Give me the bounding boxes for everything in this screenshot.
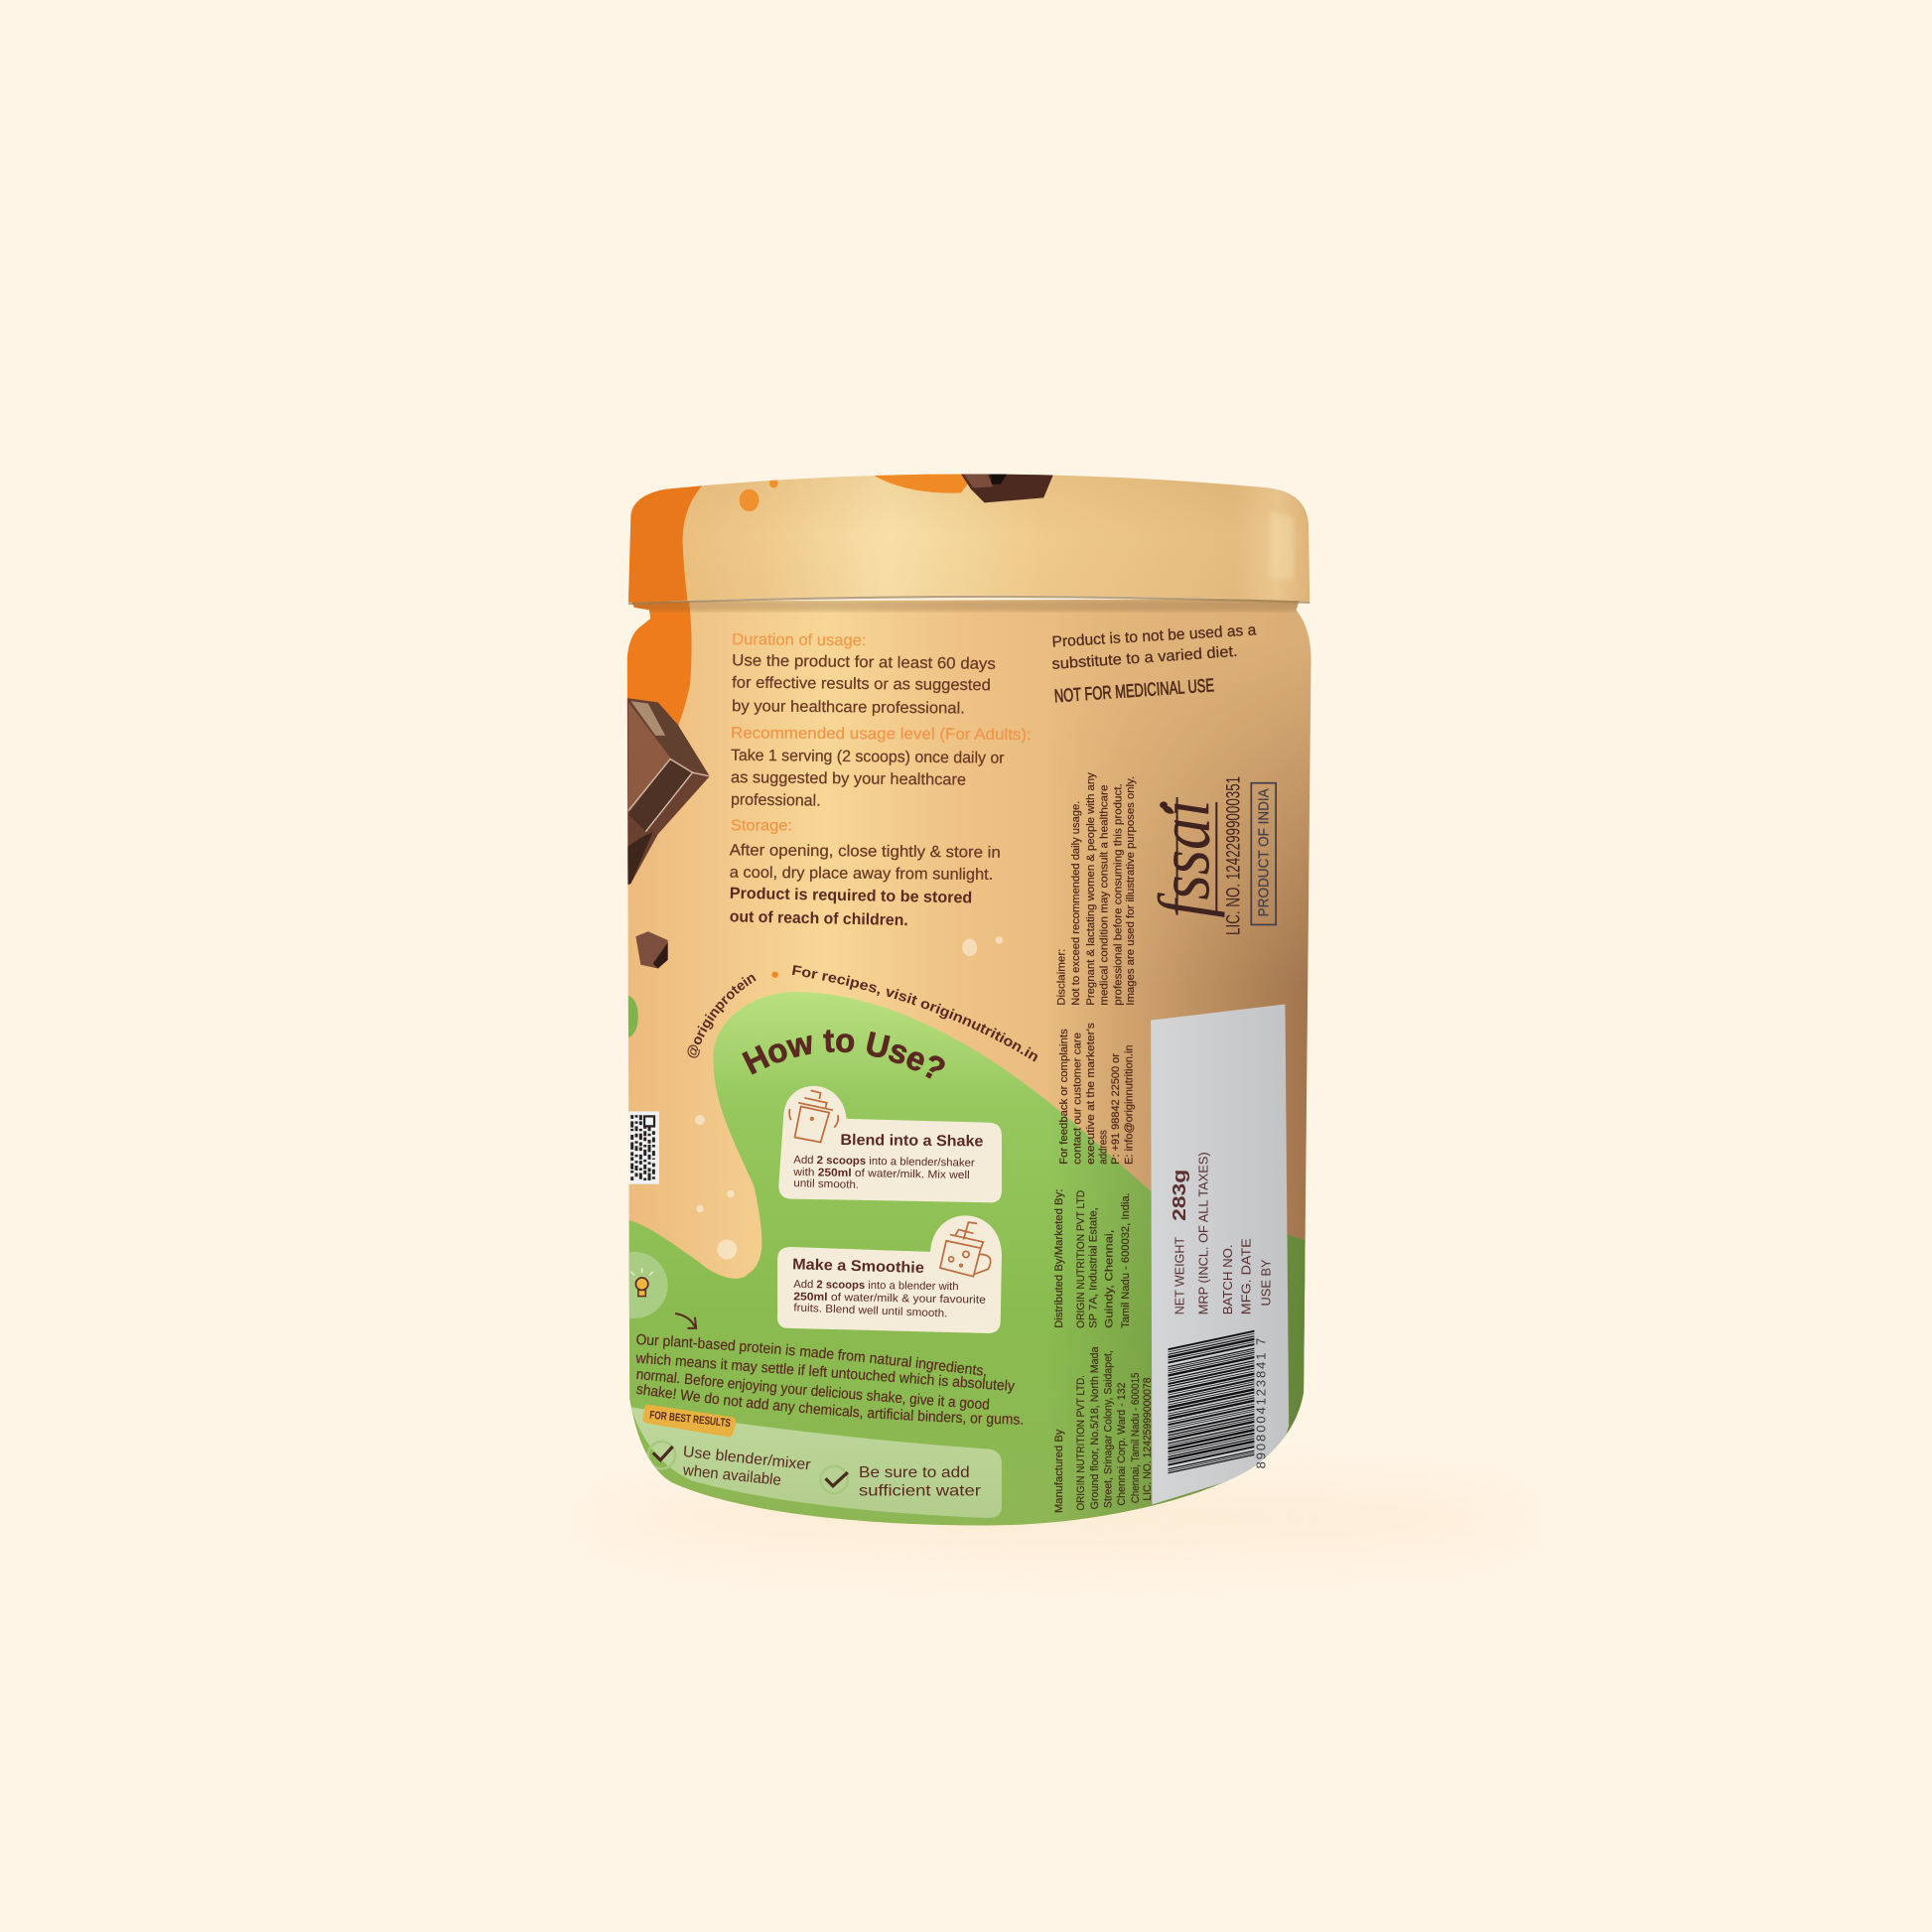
how-to-use card: shake [778,1086,1002,1202]
disclaimer block: professional before consuming this product. [1112,783,1124,1006]
product settling note: which means it may settle if left untouched which is absolutely [635,1352,1015,1394]
product settling note: normal. Before enjoying your delicious shake, give it a good [636,1370,989,1411]
orange splash top [863,469,980,493]
check item two: Be sure to add [859,1464,970,1481]
orange splash on lid [622,469,705,610]
fssai logo [1144,776,1245,935]
feedback block: E: info@originnutrition.in [1124,1044,1136,1165]
distributed by block: ORIGIN NUTRITION PVT LTD [1075,1190,1087,1328]
green side shading [1083,1133,1306,1517]
text: blend [792,1132,984,1191]
text: blend: Add 2 scoops into a blender/shaker [793,1155,975,1170]
usage directions text: Recommended usage level (For Adults): [731,724,1032,744]
jar body [602,598,1318,1553]
text: blend: Blend into a Shake [840,1132,984,1150]
best results panel [630,1407,1002,1518]
barcode [1211,1338,1269,1468]
usage directions text: a cool, dry place away from sunlight. [730,864,993,884]
bulb badge [629,1251,668,1318]
disclaimer block [1055,772,1137,1006]
product settling note [635,1334,1023,1427]
green leaf [627,996,638,1037]
text: blend: until smooth. [793,1177,859,1191]
usage directions text: by your healthcare professional. [732,697,965,718]
usage directions text: Storage: [731,816,792,834]
manufactured by block: Chennai Corp. Ward - 132 [1116,1382,1128,1506]
disclaimer block: Disclaimer: [1055,949,1067,1006]
distributed by block: Distributed By/Marketed By: [1053,1189,1065,1328]
text: smoothie: Make a Smoothie [792,1256,925,1277]
social and recipes curved text [687,965,1037,1062]
arrow [675,1313,696,1328]
disclaimer block: medical condition may consult a healthcare [1099,785,1111,1006]
label text: USE BY [1259,1259,1274,1307]
QR code [628,1111,659,1184]
product settling note: Our plant-based protein is made from natural ingredients, [636,1334,986,1378]
distributed by block: Guindy, Chennai, [1104,1230,1116,1328]
feedback block: For feedback or complaints [1058,1029,1070,1165]
green wave and how-to-use panel [617,992,1318,1553]
distributed by block: Tamil Nadu - 600032, India. [1120,1192,1132,1328]
check item one: Use blender/mixer [682,1444,811,1473]
diet notice: NOT FOR MEDICINAL USE [1053,674,1215,706]
fssai logo: LIC. NO. 12422999000351 [1224,776,1245,935]
distributed by block [1053,1189,1132,1328]
label text: MRP (INCL. OF ALL TAXES) [1195,1152,1210,1314]
usage directions text: as suggested by your healthcare [731,768,966,789]
social and recipes curved text: @originprotein [687,975,757,1058]
label text: MFG. DATE [1239,1238,1254,1314]
diet notice: Product is to not be used as a [1051,621,1257,651]
usage directions text: Duration of usage: [732,630,867,649]
text: smoothie: 250ml of water/milk & your favourite [793,1291,986,1307]
label text: 283g [1169,1170,1189,1221]
check item two [821,1464,981,1500]
check item one: when available [681,1462,782,1489]
usage directions text: out of reach of children. [730,907,908,929]
decorative dots [695,936,1003,1259]
product jar illustration [627,475,1486,1559]
disclaimer block: Pregnant & lactating women & people with any [1085,772,1097,1006]
disclaimer block: Not to exceed recommended daily usage. [1070,801,1082,1006]
how to use heading: How to Use? [742,1030,945,1079]
manufactured by block: ORIGIN NUTRITION PVT LTD. [1075,1375,1087,1511]
orange dots [740,479,778,511]
product settling note: shake! We do not add any chemicals, artificial binders, or gums. [635,1384,1023,1427]
manufactured by block [1053,1346,1154,1513]
icon: shaker [789,1090,838,1142]
usage directions text: for effective results or as suggested [732,674,991,694]
usage directions text: Product is required to be stored [730,885,972,906]
white price label [1151,1004,1289,1504]
usage directions text: Take 1 serving (2 scoops) once daily or [731,747,1005,767]
usage directions text: Use the product for at least 60 days [732,651,996,673]
diet notice [1051,621,1257,706]
disclaimer block: Images are used for illustrative purposes only. [1125,776,1137,1006]
text: smoothie: fruits. Blend well until smooth. [793,1303,948,1319]
diet notice: substitute to a varied diet. [1051,643,1238,673]
feedback block [1058,1023,1136,1165]
usage directions text: After opening, close tightly & store in [730,841,1001,862]
check item one [648,1442,811,1489]
feedback block: contact our customer care [1071,1033,1083,1165]
small chocolate piece [635,931,668,968]
fssai logo: fssai [1144,799,1225,918]
icon: smoothie jar [940,1222,991,1277]
manufactured by block: Ground floor, No.5/18, North Mada [1089,1346,1101,1509]
manufactured by block: Street, Srinagar Colony, Saidapet, [1102,1350,1114,1508]
chocolate piece top [957,469,1056,502]
how-to-use card: smoothie [777,1215,1002,1333]
usage directions text [730,630,1032,929]
product of india box: PRODUCT OF INDIA [1257,788,1273,916]
orange splash on body [627,601,692,760]
manufactured by block: Chennai, Tamil Nadu - 600015 [1130,1373,1142,1503]
manufactured by block: LIC. NO. 12425999000078 [1142,1378,1154,1501]
label text: NET WEIGHT [1173,1237,1187,1314]
social and recipes curved text: For recipes, visit originnutrition.in [792,965,1037,1062]
distributed by block: SP 7A, Industrial Estate, [1088,1207,1100,1328]
chocolate piece left [622,697,710,888]
manufactured by block: Manufactured By [1053,1429,1065,1513]
label text: BATCH NO. [1220,1244,1235,1314]
feedback block: address [1097,1130,1109,1165]
best results tag [643,1405,736,1437]
check item two: sufficient water [859,1483,981,1500]
usage directions text: professional. [731,790,821,810]
text: blend: with 250ml of water/milk. Mix well [792,1167,970,1181]
best results tag: FOR BEST RESULTS [649,1410,731,1430]
label text [1169,1152,1274,1314]
feedback block: P: +91 98842 22500 or [1110,1053,1122,1165]
product of india box [1251,783,1276,924]
text: smoothie: Add 2 scoops into a blender with [793,1279,959,1293]
barcode: 8908004123841 7 [1254,1338,1269,1468]
feedback block: executive at the marketer's [1085,1023,1097,1165]
neck shadow band [617,600,1318,612]
tan side shading [1076,613,1311,1502]
text: smoothie [792,1256,986,1319]
lid seam [628,597,1310,604]
ground shadow [592,1481,1528,1555]
jar lid [622,462,1318,610]
